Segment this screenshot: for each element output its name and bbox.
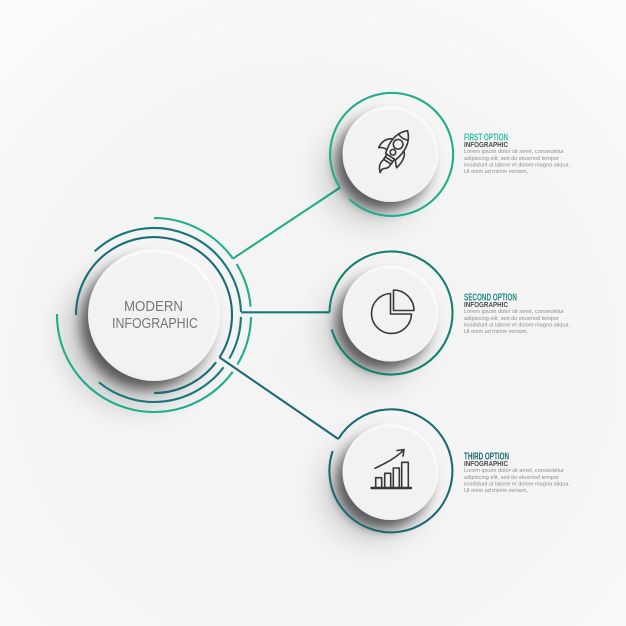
panel: second option node [325,251,452,381]
text block: first option: INFOGRAPHIC [464,142,508,149]
connector: first option [233,188,340,259]
text block: second option: adipiscing elit, sed do eiusmod tempor [464,316,559,322]
connector: second option [241,311,330,313]
hub rings [57,218,251,412]
icon: growth bars [372,450,411,488]
disc [342,266,438,362]
text block: third option [464,450,570,494]
text block: second option: incididunt ut labore et dolore magna aliqua. [464,322,570,328]
text block: second option: Ut enim ad minim veniam, [464,329,528,335]
disc [342,106,438,202]
central title [112,298,198,332]
central title: MODERN [124,298,183,315]
text block: first option: adipiscing elit, sed do eiusmod tempor [464,156,559,162]
panel: third option node [325,409,452,539]
ring [330,251,452,374]
connector: third option [220,357,338,439]
text block: first option: Lorem ipsum dolor sit amet, consectetur [464,149,564,155]
disc [342,424,438,520]
panel: central hub [66,249,220,405]
central disc [88,249,220,381]
text block: first option [464,132,570,175]
text block: third option: THIRD OPTION [464,450,509,462]
text block: first option: FIRST OPTION [464,132,508,144]
text block: third option: incididunt ut labore et dolore magna aliqua. [464,482,570,488]
ring [329,409,452,532]
text block: second option [464,292,570,335]
text block: third option: INFOGRAPHIC [464,461,508,468]
panel: first option node [325,93,453,221]
text block: third option: Lorem ipsum dolor sit amet, consectetur [464,468,564,474]
icon: rocket [368,122,418,179]
text block: second option: Lorem ipsum dolor sit amet, consectetur [464,309,564,315]
ring [330,93,453,216]
text block: second option: INFOGRAPHIC [464,302,508,309]
icon: pie chart [372,290,414,333]
text block: second option: SECOND OPTION [464,292,517,304]
central title: INFOGRAPHIC [112,315,198,332]
text block: first option: Ut enim ad minim veniam, [464,169,528,175]
text block: first option: incididunt ut labore et dolore magna aliqua. [464,162,570,168]
text block: third option: Ut enim ad minim veniam, [464,488,528,494]
text block: third option: adipiscing elit, sed do eiusmod tempor [464,475,559,481]
